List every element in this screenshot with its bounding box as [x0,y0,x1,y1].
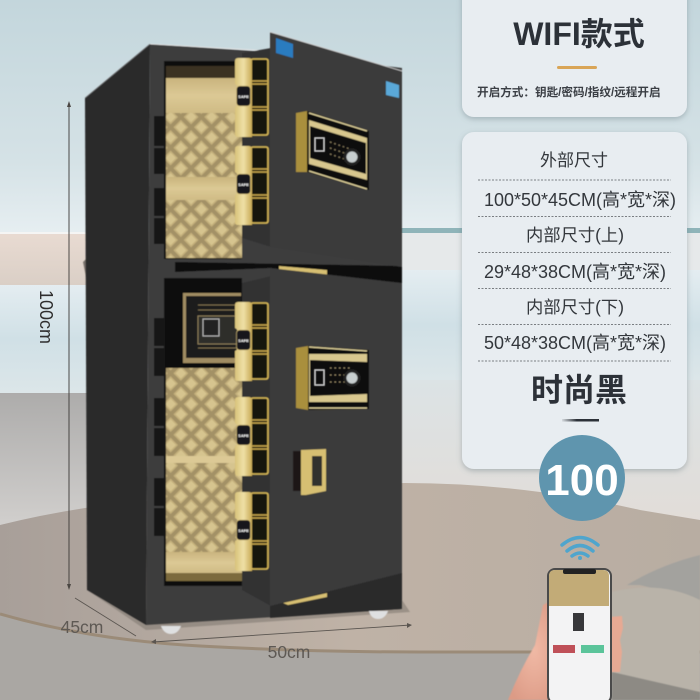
dimension: depth 45cm: 45cm [61,617,103,637]
app safe thumbnail [573,613,584,631]
feet [161,611,388,634]
app header [549,570,609,606]
gold floor [166,552,242,573]
app accept button [581,645,604,653]
lock: upper door keypad [296,111,369,190]
upper hinge 1: SAFE [238,94,249,99]
opening methods: 开启方式：钥匙/密码/指纹/远程开启 [477,85,661,99]
upper internal size label: 内部尺寸(上) [526,225,624,245]
lower lattice panel [166,368,242,566]
lower internal size value: 50*48*38CM(高*宽*深) [484,333,666,353]
heading underline [557,66,597,69]
small item behind safe [83,258,87,277]
gold lattice back panel [166,113,242,258]
lower hinge 3 [235,492,268,571]
colour divider [562,419,599,422]
upper hinge 2 [235,146,268,225]
floor shadow [90,592,410,630]
wifi icon [562,538,598,560]
badge: 100: 100 [545,456,619,505]
door handle [293,449,326,495]
lower hinge 2 [235,397,268,476]
inner safe box [183,293,242,363]
lower door edge [242,276,271,606]
hand holding phone [508,600,623,700]
lower hinge 1 [235,302,268,381]
colour name: 时尚黑 [531,372,627,408]
lower shelf top [166,456,242,463]
certification badge [386,81,399,98]
upper door edge [242,48,271,247]
frame bolt slots [154,116,165,536]
external size value: 100*50*45CM(高*宽*深) [484,190,676,210]
dimension: height 100cm [36,101,71,590]
lower hinge 3: SAFE [238,528,249,533]
upper door [270,32,402,267]
lock: lower door keypad [296,346,369,410]
divider shelf [175,262,402,285]
panel: dimensions [462,132,687,469]
lower hinge 1: SAFE [238,338,249,343]
dimension: width 50cm [151,623,412,662]
upper compartment [164,61,242,259]
safe front frame [146,44,402,625]
gold latch strip [279,266,327,276]
door gold strip [283,593,327,605]
lower hinge 2: SAFE [238,433,249,438]
upper hinge 1 [235,58,268,137]
dimension: width 50cm: 50cm [268,642,310,662]
panel: WIFI style [462,0,687,117]
lower compartment [164,278,242,586]
upper hinge 2: SAFE [238,182,249,187]
dimension: depth 45cm [61,598,136,637]
gold middle shelf [166,177,242,200]
phone notch [563,569,596,574]
dimension: height 100cm: 100cm [36,290,56,344]
safe side panel [85,44,150,625]
safe cabinet [83,32,410,634]
app reject button [553,645,575,653]
upper internal size value: 29*48*38CM(高*宽*深) [484,262,666,282]
badge: 100 [539,435,625,521]
gold top shelf [166,78,242,113]
heading: WIFI style: WIFI款式 [513,16,645,52]
external size label: 外部尺寸 [540,151,608,170]
lower internal size label: 内部尺寸(下) [526,297,624,317]
floor and carpet edge [0,614,700,700]
phone with app [547,568,612,700]
lower door [270,268,402,618]
sofa and pillow [612,555,700,700]
brand badge [276,38,293,58]
